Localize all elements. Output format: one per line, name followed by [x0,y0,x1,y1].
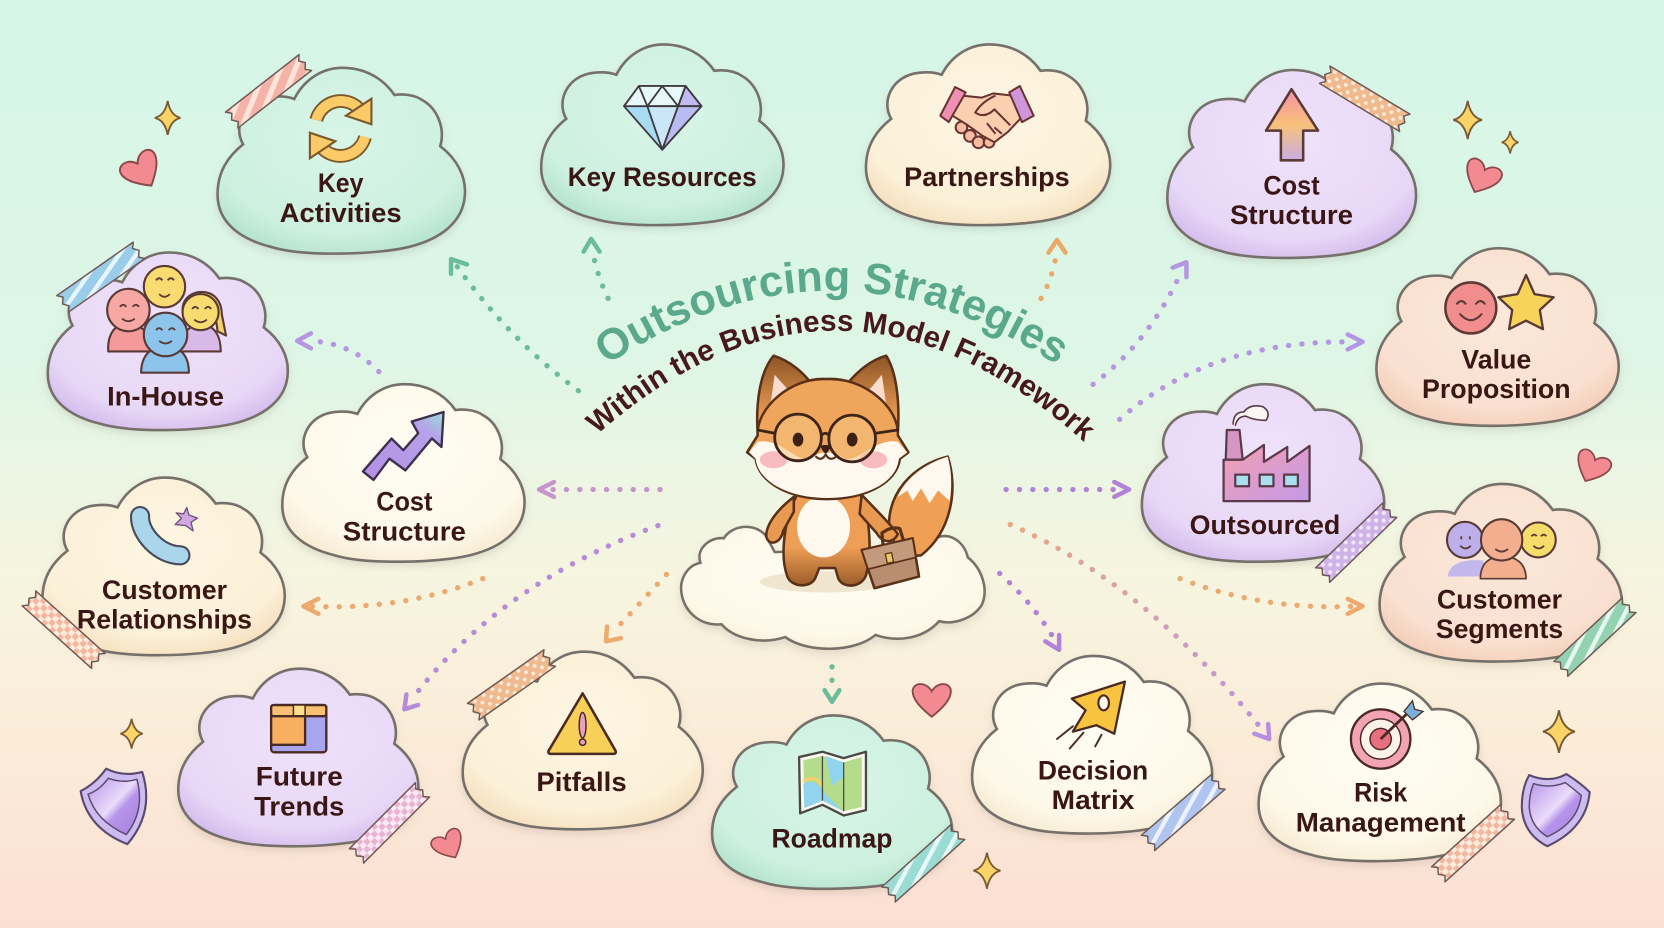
arrow to Key Resources [584,239,608,298]
tape: Customer Segments [1554,598,1636,676]
arrow to Partnerships [1041,240,1065,298]
heart [1570,447,1613,488]
label: Value [1461,344,1531,374]
icon: phone with spark [140,508,197,555]
panel: Value Proposition [1376,248,1619,426]
icon: factory [1224,406,1310,501]
tape: Roadmap [882,824,965,902]
panel: In-House [48,253,288,430]
icon: handshake [940,86,1034,148]
icon: three customers [1447,519,1556,579]
icon: layout window [271,705,326,752]
fox mascot [747,356,952,592]
panel: Customer Segments [1380,484,1622,662]
icon: diamond [624,86,701,150]
heart [1458,156,1504,200]
label: Future [256,762,343,792]
label: Risk [1354,778,1407,808]
arrow to Roadmap [825,667,839,702]
label: Segments [1436,614,1563,644]
label: Cost [376,487,433,517]
arrow to Customer Relationships [304,579,483,614]
icon: rocket [1057,682,1125,749]
icon: shield right [1522,774,1590,846]
heart [913,684,951,717]
panel: Key Resources [541,44,784,225]
label: Proposition [1422,374,1571,404]
panel: Customer Relationships [42,478,285,655]
tape: In-House [57,242,145,312]
sparkle [120,719,143,749]
label: Structure [1230,200,1353,230]
arrow to Decision Matrix [1000,573,1059,650]
body [760,493,898,592]
title: curved heading [584,262,1094,442]
panel: Outsourced [1142,384,1384,562]
sparkle [973,853,1000,889]
label: Trends [254,791,344,821]
panel: Cost Structure right [1167,70,1416,258]
tail [889,457,952,556]
label: Matrix [1052,785,1135,815]
arrow to Outsourced [1006,482,1129,497]
label [280,168,402,228]
icon: up arrow [1266,89,1318,160]
sparkle [1502,131,1518,153]
label: Key Resources [568,162,757,192]
label: Decision [1038,755,1148,785]
arrow to Key Activities [451,259,578,391]
icon: rising zigzag arrow [363,412,444,480]
icon: team of four [107,266,226,373]
tape: Risk Management [1432,804,1514,882]
label [1038,755,1148,815]
arrow to Risk Management [1010,525,1269,739]
heading: Outsourcing Strategies: Outsourcing Strategies [597,262,1065,362]
label: Key [318,168,364,198]
label: Structure [343,516,466,546]
subheading: Within the Business Model Framework: Within the Business Model Framework [584,312,1094,442]
tape: Customer Relationships [22,591,105,668]
icon: smiley and star [1445,275,1554,333]
label: Cost [1263,170,1320,200]
heart [117,147,168,196]
dotted arrows [297,239,1363,739]
tape: Future Trends [349,783,430,863]
label: Customer [102,575,227,605]
tape: Cost Structure right [1320,66,1410,131]
tape: Outsourced [1316,503,1397,582]
arrow to Value Proposition [1120,334,1363,419]
label [77,575,252,635]
panel: Key Activities [218,68,465,254]
panel: Cost Structure middle [282,384,525,562]
label [254,762,344,821]
label [343,487,466,546]
decorations: sparkles, hearts and shields [81,101,1613,889]
label [1436,584,1563,644]
label: Activities [280,198,402,228]
arrow to Customer Segments [1180,579,1363,614]
tape: Key Activities [225,55,311,128]
label [1296,778,1466,837]
label [1422,344,1571,404]
sparkle [1453,101,1482,139]
panel: Pitfalls [463,652,703,829]
panel: Risk Management [1259,684,1501,861]
label: Pitfalls [536,767,627,797]
panel: Partnerships [866,44,1110,225]
arrow to Future Trends [404,526,658,709]
panel: Roadmap [712,715,952,889]
panel: Future Trends [178,669,418,846]
heart [429,826,469,865]
icon: refresh arrows [310,99,371,158]
tape: Decision Matrix [1141,774,1225,851]
arrow to Cost Structure middle [539,482,660,497]
glasses [758,414,898,462]
label: Customer [1437,584,1562,614]
icon: folded map [799,752,866,815]
sparkle [1543,710,1575,753]
label: In-House [107,382,224,412]
briefcase [862,528,919,588]
tape: Pitfalls [467,650,556,720]
label: Relationships [77,605,252,635]
label: Outsourced [1190,510,1340,540]
icon: target with arrow [1351,701,1423,769]
label: Partnerships [904,162,1070,192]
arrow to In-House [297,333,379,372]
icon: shield left [81,769,146,844]
center cloud [681,527,985,649]
arrow to Cost Structure right [1093,262,1186,384]
sparkle [155,101,180,135]
panel: Decision Matrix [972,656,1212,834]
arrow to Pitfalls [606,574,666,641]
icon: warning triangle [548,693,616,754]
label: Roadmap [772,823,892,853]
label: Management [1296,807,1466,837]
head [747,356,908,499]
label [1230,170,1353,230]
